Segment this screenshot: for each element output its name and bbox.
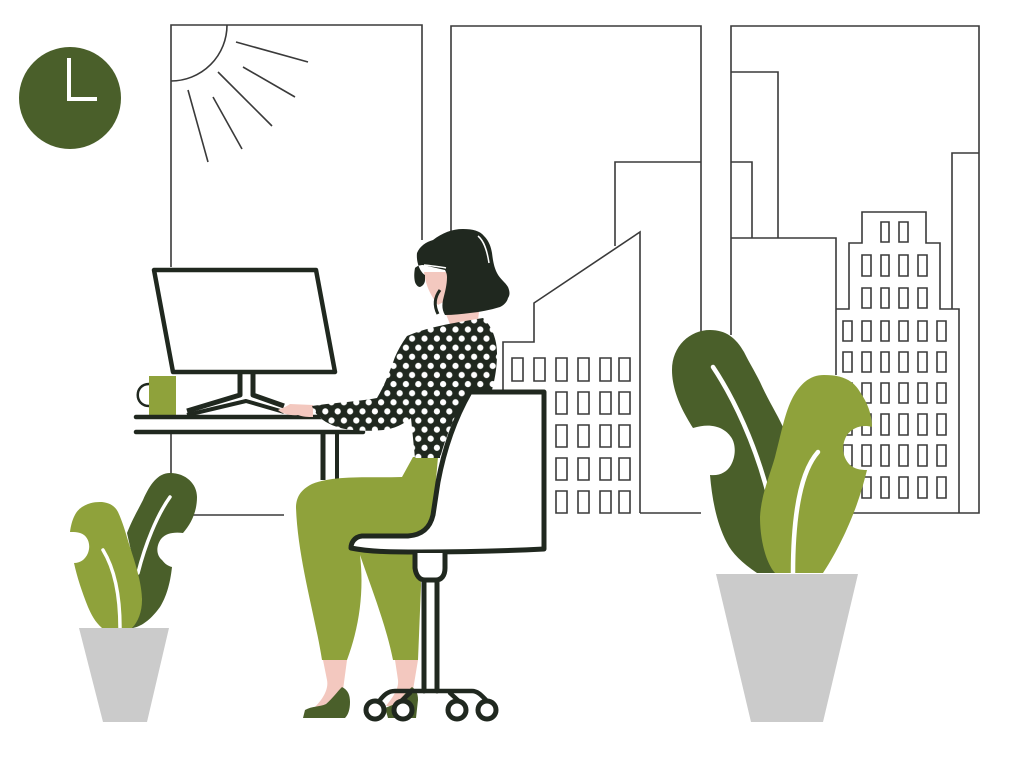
- chair: wheels: [366, 701, 496, 719]
- woman: trousers: [296, 457, 438, 660]
- large plant: [672, 330, 872, 722]
- large plant: dark leaf: [672, 330, 783, 573]
- window frames: [171, 25, 979, 515]
- large plant: light leaf vein: [793, 452, 818, 573]
- woman: face: [424, 272, 447, 305]
- large plant: dark leaf vein: [713, 367, 767, 490]
- coffee mug: [138, 376, 176, 415]
- small plant: light leaf vein: [103, 550, 120, 628]
- small plant: dark leaf: [125, 473, 197, 628]
- woman: polka dot blouse: [312, 318, 497, 458]
- city buildings: centre window: [503, 162, 701, 513]
- desk: [136, 417, 363, 480]
- small plant: [70, 473, 197, 722]
- woman: [278, 229, 510, 718]
- small plant: light leaf: [70, 502, 142, 628]
- large plant: light leaf: [760, 375, 872, 573]
- city buildings: right window: [731, 72, 979, 513]
- woman: hair strand: [435, 290, 440, 314]
- small plant: pot: [79, 628, 169, 722]
- monitor: [154, 270, 335, 415]
- clock: [19, 47, 121, 149]
- woman: hand: [278, 404, 313, 417]
- woman: neck: [445, 312, 479, 324]
- chair: column: [415, 553, 445, 691]
- chair: seat and back: [351, 392, 544, 552]
- woman: hair highlight: [424, 236, 489, 268]
- woman: ankles: [314, 660, 418, 708]
- woman: shoes: [303, 687, 418, 718]
- sun: [171, 25, 308, 162]
- large plant: pot: [716, 574, 858, 722]
- office chair: [351, 392, 544, 719]
- woman: hair: [414, 229, 510, 315]
- small plant: dark leaf vein: [138, 497, 170, 573]
- chair: base: [380, 691, 486, 704]
